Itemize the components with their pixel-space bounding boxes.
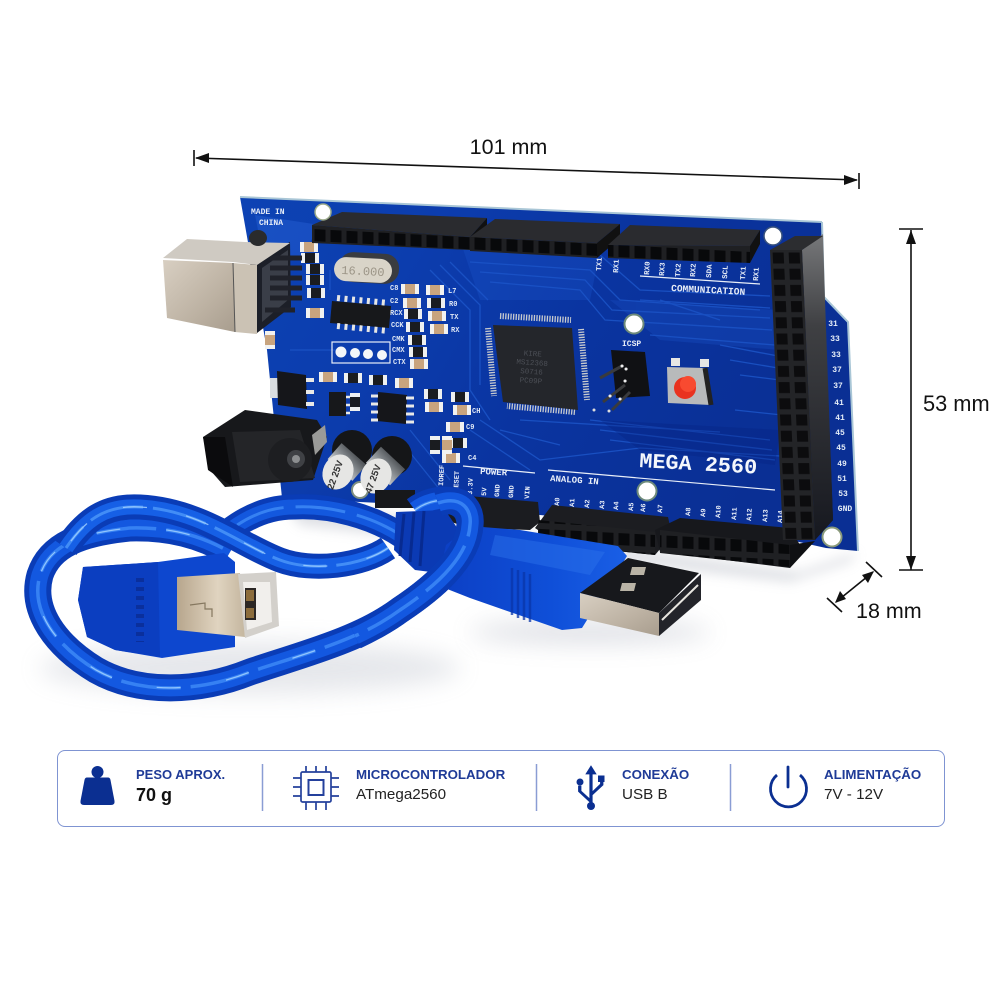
digital pin numbers: 33: [831, 351, 841, 360]
communication pin labels: RX1: [753, 267, 762, 281]
small ic: [329, 392, 414, 424]
reset button: [667, 358, 711, 405]
spec: connection text: [622, 767, 689, 803]
microcontroller atmega2560: PC09P: [519, 377, 543, 387]
usb b metal: [177, 573, 245, 637]
digital pin numbers: 33: [830, 335, 840, 344]
crystal oscillator: 16.000: [341, 264, 385, 280]
cable strand: big loop: [38, 500, 470, 688]
icsp header: [592, 340, 650, 412]
dimension: width 101 mm: [194, 135, 859, 189]
power and analog silk labels: A5: [628, 502, 636, 511]
spec: microcontroller text: MICROCONTROLADOR: [356, 767, 505, 782]
pin header: bottom rows: [420, 492, 815, 568]
spec: connection text: CONEXÃO: [622, 767, 689, 782]
power and analog silk labels: 5V: [481, 487, 489, 496]
digital pin numbers: 37: [832, 366, 842, 375]
communication pin labels: [596, 257, 762, 298]
dimension: width 101 mm: 101 mm: [470, 135, 547, 159]
capacitor 1: 22 25V: [325, 459, 346, 491]
icsp header: ICSP: [622, 340, 641, 349]
spec: power text: 7V - 12V: [824, 786, 883, 803]
spec: connection text: USB B: [622, 786, 668, 803]
spec: microcontroller text: ATmega2560: [356, 786, 446, 803]
icon: weight: [80, 766, 115, 805]
top silk label: made in china: MADE IN: [251, 208, 285, 217]
specifications panel: [57, 750, 945, 827]
small silk labels: TX: [450, 314, 459, 322]
digital pin numbers: GND: [838, 505, 852, 514]
digital pin numbers: 51: [837, 475, 847, 484]
usb a connector: [394, 510, 701, 636]
power and analog silk labels: VIN: [524, 486, 533, 499]
usb b plug: [78, 553, 279, 658]
communication pin labels: TX1: [740, 266, 749, 280]
microcontroller atmega2560: [488, 316, 587, 412]
crystal oscillator: [333, 251, 400, 285]
communication pin labels: RX2: [690, 263, 699, 277]
icon: microchip: [293, 766, 339, 810]
power and analog silk labels: A6: [640, 503, 648, 512]
communication pin labels: RX0: [644, 261, 653, 275]
spec: microcontroller text: [356, 767, 505, 803]
small silk labels: CMK: [392, 336, 405, 344]
power and analog silk labels: A0: [554, 497, 562, 506]
communication pin labels: RX1: [613, 259, 622, 273]
dimension: height 53 mm: 53 mm: [923, 391, 990, 416]
digital pin numbers: 41: [834, 399, 844, 408]
communication pin labels: SCL: [722, 265, 731, 279]
spec: weight text: 70 g: [136, 785, 172, 805]
power and analog silk labels: A10: [715, 505, 724, 518]
small silk labels: RCX: [390, 310, 403, 318]
digital pin numbers: 45: [835, 429, 845, 438]
digital pin numbers: 41: [835, 414, 845, 423]
usb a boot: [437, 526, 627, 630]
usb b boot: [78, 553, 235, 658]
spec: weight text: PESO APROX.: [136, 767, 225, 782]
top silk label: made in china: CHINA: [259, 219, 283, 228]
communication pin labels: TX2: [675, 263, 684, 277]
microcontroller atmega2560: MS12368: [516, 359, 548, 369]
digital pin numbers: 53: [838, 490, 848, 499]
power and analog silk labels: POWER: [480, 467, 508, 478]
power and analog silk labels: A1: [569, 498, 577, 507]
digital pin numbers: [828, 320, 852, 514]
usb a opening: [659, 574, 701, 636]
small silk labels: CMX: [392, 347, 405, 355]
usb cable: [38, 500, 701, 688]
power and analog silk labels: GND: [508, 485, 517, 498]
usb b socket: [163, 230, 302, 334]
pin header: right double row: [770, 234, 833, 540]
small silk labels: CCK: [391, 322, 404, 330]
power and analog silk labels: ANALOG IN: [550, 474, 599, 487]
dimension: depth 18 mm: 18 mm: [856, 599, 922, 623]
small silk labels: R0: [449, 301, 457, 309]
spec: power text: ALIMENTAÇÃO: [824, 767, 921, 782]
communication pin labels: COMMUNICATION: [671, 283, 746, 298]
small silk labels: L7: [448, 288, 456, 296]
power and analog silk labels: A11: [731, 507, 740, 520]
small silk labels: C8: [390, 285, 398, 293]
small silk labels: C2: [390, 298, 398, 306]
communication pin labels: SDA: [706, 264, 715, 278]
power and analog silk labels: GND: [494, 484, 503, 497]
icon: power: [770, 767, 807, 807]
power and analog silk labels: A9: [700, 508, 708, 517]
board name: MEGA 2560: [639, 451, 758, 481]
power and analog silk labels: RESET: [453, 471, 462, 492]
arduino mega board: [163, 197, 858, 568]
dc power jack: [203, 410, 327, 487]
power and analog silk labels: A12: [746, 508, 755, 521]
icon: usb: [576, 766, 604, 810]
ground shadows: [40, 500, 858, 694]
smd components: [265, 242, 471, 463]
small silk labels: C4: [468, 455, 476, 463]
power and analog silk labels: A2: [584, 499, 592, 508]
usb interface chip: [330, 298, 391, 331]
small silk labels: [390, 285, 480, 463]
small silk labels: C9: [466, 424, 474, 432]
circuit board base: [240, 197, 858, 551]
power and analog silk labels: [438, 465, 786, 523]
power and analog silk labels: IOREF: [438, 465, 447, 486]
top silk label: made in china: [251, 208, 285, 228]
usb a shell front: [580, 593, 659, 636]
small silk labels: RX: [451, 327, 460, 335]
dimension: depth 18 mm: [827, 562, 922, 623]
power and analog silk labels: 3.3V: [467, 477, 476, 495]
pin header: digital top row: [312, 212, 760, 263]
power and analog silk labels: A7: [657, 504, 665, 513]
cable strand: back: [210, 507, 402, 548]
mounting holes: [315, 204, 842, 546]
copper traces: [290, 255, 782, 490]
pad row a1: [332, 342, 390, 363]
communication pin labels: TX1: [596, 257, 605, 271]
voltage regulator: [270, 371, 314, 409]
electrolytic capacitors: [317, 430, 415, 508]
small silk labels: CTX: [393, 359, 406, 367]
spec: weight text: [136, 767, 225, 805]
dimension: height 53 mm: [899, 229, 990, 570]
power and analog silk labels: A14: [777, 510, 786, 523]
board edge highlight: [240, 197, 858, 551]
digital pin numbers: 49: [837, 460, 847, 469]
spec: power text: [824, 767, 921, 803]
small silk labels: CH: [472, 408, 480, 416]
power and analog silk labels: A4: [613, 501, 621, 510]
communication pin labels: RX3: [659, 262, 668, 276]
digital pin numbers: 37: [833, 382, 843, 391]
lighter ground planes: [255, 215, 780, 465]
microcontroller atmega2560: KIRE: [523, 350, 542, 360]
digital pin numbers: 31: [828, 320, 838, 329]
digital pin numbers: 45: [836, 444, 846, 453]
cable strand: twist: [66, 507, 388, 566]
power and analog silk labels: A8: [685, 507, 693, 516]
usb a shell top: [580, 558, 699, 613]
power and analog silk labels: A13: [762, 509, 771, 522]
cable strand: loop front: [355, 501, 470, 636]
capacitor 2: 47 25V: [363, 463, 384, 495]
usb b opening: [238, 572, 279, 638]
microcontroller atmega2560: S0716: [520, 368, 543, 378]
usb a neck: [394, 510, 462, 575]
power and analog silk labels: A3: [599, 500, 607, 509]
